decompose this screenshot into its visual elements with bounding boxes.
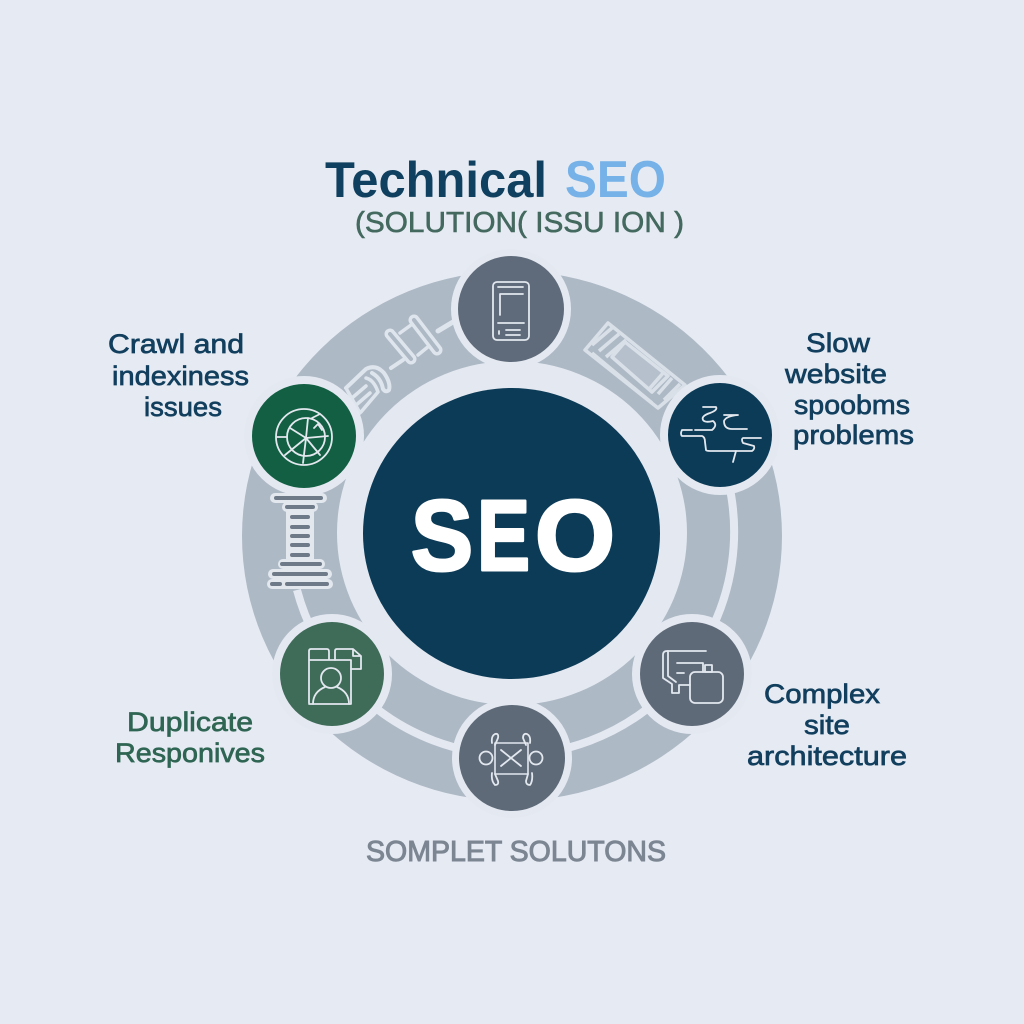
icon: crawl globe xyxy=(276,409,332,465)
label: complex site architecture: Complex xyxy=(764,679,881,709)
footer label: SOMPLET SOLUTONS xyxy=(366,836,666,868)
subtitle: (SOLUTION( ISSU ION ) xyxy=(355,207,684,239)
label: slow website problems: problems xyxy=(793,420,914,450)
title: Technical xyxy=(325,152,547,208)
SEO label xyxy=(411,480,615,592)
icon: tangled path xyxy=(681,407,761,462)
icon: chat and case xyxy=(663,651,723,703)
label: crawl and indexiness issues: indexiness xyxy=(112,361,249,391)
label: complex site architecture: site xyxy=(804,710,850,740)
icon: pin connector on ring xyxy=(346,320,453,413)
node: duplicate green xyxy=(272,614,392,734)
icon: mobile device xyxy=(493,282,529,340)
icon: stacked column on ring xyxy=(272,498,328,584)
label: complex site architecture xyxy=(747,679,907,771)
node: crawl green xyxy=(244,376,364,496)
label: slow website problems: spoobms xyxy=(794,390,910,420)
label: crawl and indexiness issues xyxy=(108,329,249,422)
icon: server rack on ring xyxy=(585,323,685,408)
label: slow website problems xyxy=(784,328,914,450)
label: complex site architecture: architecture xyxy=(747,741,907,771)
SEO label: O xyxy=(535,480,615,592)
title: SEO xyxy=(565,151,666,209)
node: slow website navy xyxy=(660,375,780,495)
label: slow website problems: website xyxy=(784,359,887,389)
SEO label: E xyxy=(477,480,530,592)
SEO label: S xyxy=(411,480,473,592)
outer ring xyxy=(242,271,782,801)
label: duplicate responives xyxy=(115,707,265,768)
node: bottom solutions xyxy=(452,698,572,818)
icon: duplicate profile xyxy=(309,649,361,704)
icon: connected box xyxy=(480,734,542,785)
label: duplicate responives: Responives xyxy=(115,738,265,768)
title xyxy=(325,151,666,209)
node: complex architecture xyxy=(632,614,752,734)
central circle xyxy=(337,361,687,705)
label: crawl and indexiness issues: issues xyxy=(144,392,222,422)
label: crawl and indexiness issues: Crawl and xyxy=(108,329,244,359)
label: slow website problems: Slow xyxy=(806,328,871,358)
node: top mobile xyxy=(451,249,571,369)
label: duplicate responives: Duplicate xyxy=(127,707,253,737)
